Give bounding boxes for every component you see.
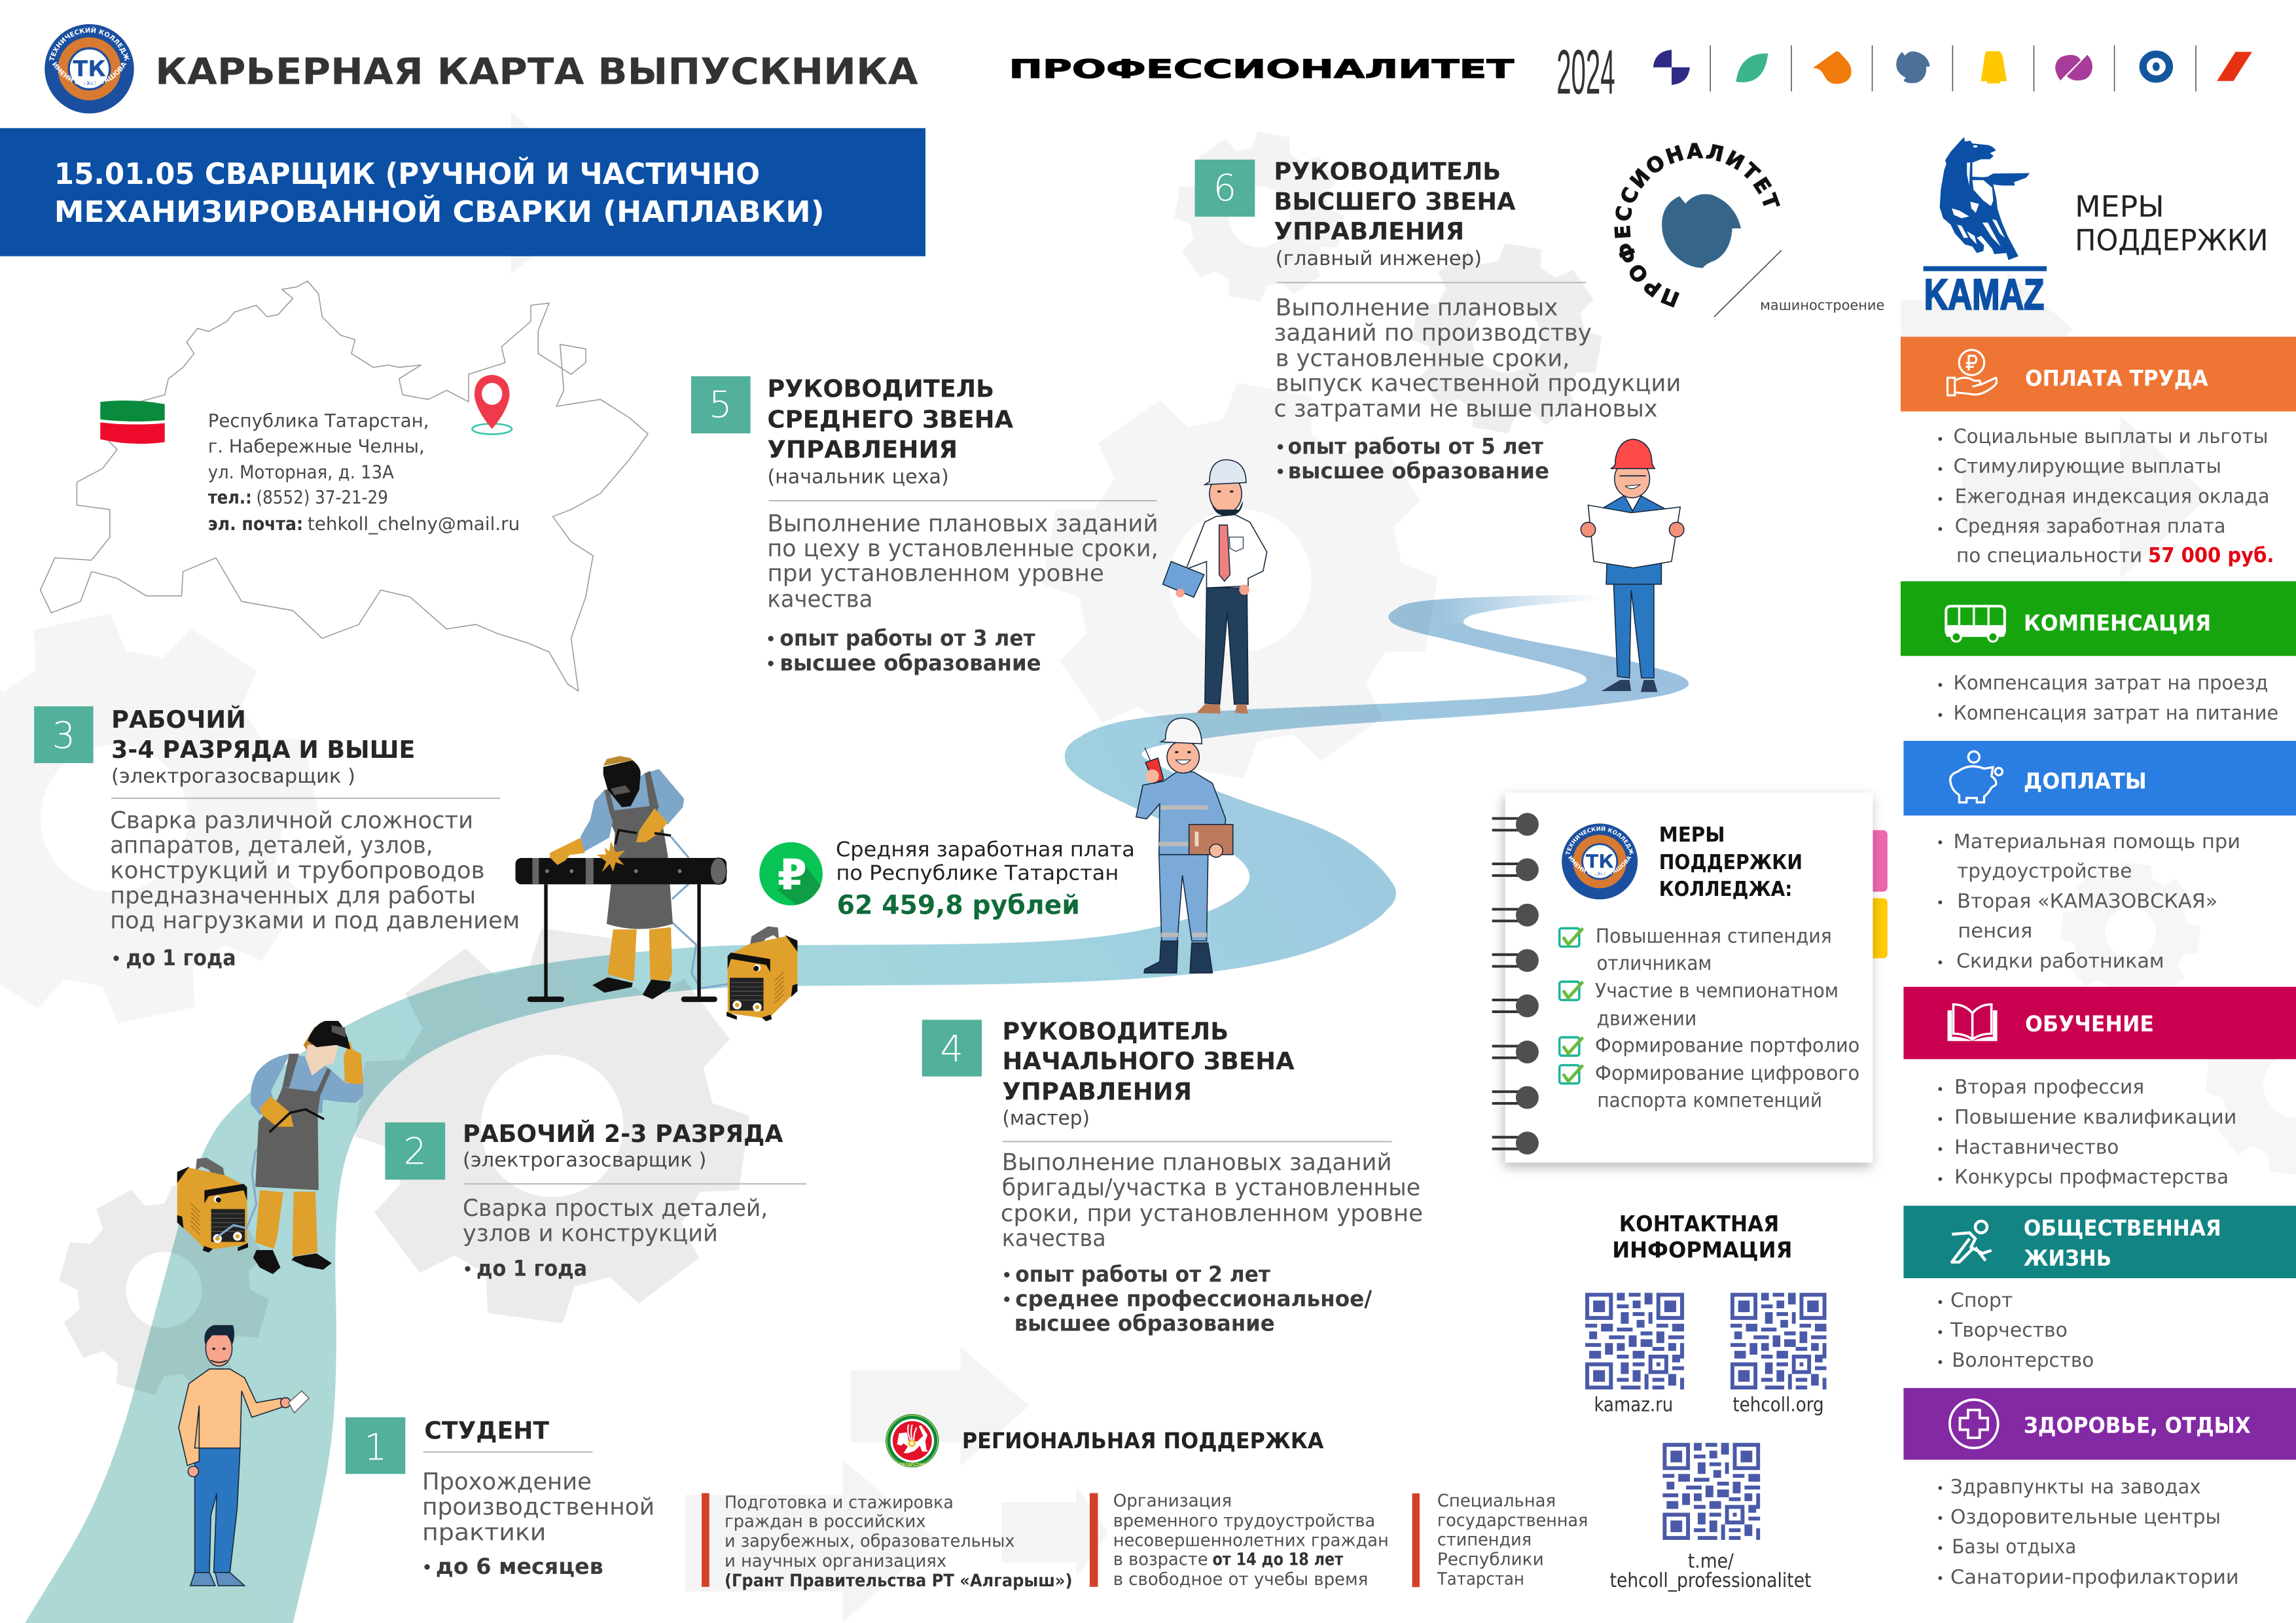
requirement: до 1 года bbox=[476, 1255, 587, 1281]
badge 3: 3 bbox=[52, 715, 75, 757]
employment block: в свободное от учебы время bbox=[1113, 1569, 1368, 1590]
compensation list bbox=[1938, 672, 2278, 726]
pay list: Средняя заработная плата bbox=[1955, 515, 2226, 539]
badge 6 bbox=[1195, 160, 1255, 217]
pay list bbox=[1938, 425, 2274, 568]
scholarship block bbox=[1412, 1491, 1588, 1589]
badge 3 bbox=[34, 706, 94, 763]
illustration: student bbox=[179, 1325, 309, 1586]
badge 6: 6 bbox=[1213, 167, 1236, 209]
scholarship block: Специальная bbox=[1437, 1491, 1556, 1511]
heading: СТУДЕНТ bbox=[424, 1417, 550, 1444]
address text: эл. почта: bbox=[208, 512, 303, 535]
heading bbox=[463, 1118, 783, 1173]
panel: public life bbox=[1903, 1205, 2296, 1373]
requirements bbox=[766, 625, 1041, 677]
college measures list: отличникам bbox=[1596, 952, 1712, 976]
education list bbox=[1938, 1076, 2236, 1190]
requirement: до 1 года bbox=[126, 945, 236, 971]
requirements: • bbox=[766, 656, 776, 673]
heading: (мастер) bbox=[1002, 1107, 1090, 1131]
heading: УПРАВЛЕНИЯ bbox=[767, 436, 958, 463]
public life list: Волонтерство bbox=[1952, 1349, 2094, 1373]
address text: г. Набережные Челны, bbox=[208, 435, 425, 457]
description: бригады/участка в установленные bbox=[1002, 1173, 1420, 1202]
college logo small: ИМЕНИ В.Д.ПОТАШОВА bbox=[1568, 855, 1631, 876]
description bbox=[1001, 1149, 1423, 1252]
panel: pay bbox=[1901, 337, 2296, 568]
Professionalitet engineering logo: машиностроение bbox=[1760, 298, 1885, 314]
Professionalitet engineering logo: ПРОФЕССИОНАЛИТЕТ bbox=[1614, 143, 1780, 308]
pay list: 57 000 руб. bbox=[2148, 544, 2274, 568]
Professionalitet engineering logo bbox=[1614, 143, 1885, 317]
address text: тел.: bbox=[208, 486, 252, 508]
compensation list: Компенсация затрат на питание bbox=[1953, 702, 2278, 726]
emblem of Tatarstan: ТАТАРСТАН bbox=[899, 1463, 925, 1467]
requirements: среднее профессиональное/ bbox=[1015, 1286, 1372, 1312]
health list: Базы отдыха bbox=[1952, 1536, 2076, 1560]
extra payments list: Скидки работникам bbox=[1956, 950, 2164, 973]
notebook heading: МЕРЫ bbox=[1659, 824, 1725, 847]
title: КАРЬЕРНАЯ КАРТА ВЫПУСКНИКА bbox=[155, 50, 919, 93]
regional support: РЕГИОНАЛЬНАЯ ПОДДЕРЖКА bbox=[962, 1428, 1324, 1454]
heading bbox=[767, 375, 1014, 489]
education list: Конкурсы профмастерства bbox=[1954, 1166, 2229, 1190]
requirements: опыт работы от 3 лет bbox=[780, 625, 1035, 652]
requirements: • bbox=[1276, 464, 1285, 482]
grant block: и научных организациях bbox=[725, 1550, 946, 1571]
step 1 bbox=[346, 1417, 655, 1580]
description: Сварка различной сложности bbox=[110, 806, 473, 834]
heading: ВЫСШЕГО ЗВЕНА bbox=[1274, 188, 1516, 215]
description: узлов и конструкций bbox=[463, 1219, 718, 1247]
description bbox=[110, 806, 520, 935]
description: качества bbox=[1002, 1224, 1106, 1252]
description: Выполнение плановых bbox=[1276, 293, 1558, 321]
description: Сварка простых деталей, bbox=[463, 1194, 768, 1222]
QR tehcoll.org: tehcoll.org bbox=[1732, 1394, 1824, 1418]
illustration: welder at the pipe, legs and apron bbox=[592, 808, 753, 1005]
heading: РУКОВОДИТЕЛЬ bbox=[1274, 158, 1501, 185]
requirements: • bbox=[1002, 1292, 1012, 1310]
requirements: • bbox=[766, 631, 776, 649]
extra payments list: трудоустройстве bbox=[1957, 860, 2132, 883]
QR kamaz.ru: kamaz.ru bbox=[1594, 1394, 1673, 1418]
panel: education bbox=[1903, 987, 2296, 1190]
icon: ruble bbox=[759, 842, 823, 906]
emblem of Tatarstan bbox=[886, 1414, 939, 1467]
heading: РАБОЧИЙ 2-3 РАЗРЯДА bbox=[463, 1118, 783, 1148]
header: college logo: ТЕХНИЧЕСКИЙ КОЛЛЕДЖ bbox=[48, 26, 130, 62]
icon: hand with ruble coin bbox=[1948, 350, 1997, 395]
grant block: (Грант Правительства РТ «Алгарыш») bbox=[725, 1570, 1073, 1591]
description bbox=[422, 1468, 655, 1546]
contact heading: ИНФОРМАЦИЯ bbox=[1612, 1237, 1792, 1263]
panel: public life: ЖИЗНЬ bbox=[2024, 1245, 2111, 1272]
requirements: опыт работы от 5 лет bbox=[1288, 433, 1544, 460]
requirement: • bbox=[422, 1560, 432, 1577]
heading: УПРАВЛЕНИЯ bbox=[1002, 1078, 1192, 1106]
description: по цеху в установленные сроки, bbox=[767, 535, 1158, 562]
illustration: welder at the pipe, torso bbox=[550, 756, 684, 872]
requirement: до 6 месяцев bbox=[436, 1554, 603, 1580]
public life list: Спорт bbox=[1950, 1289, 2013, 1313]
binder tabs bbox=[1859, 830, 1888, 958]
heading bbox=[1274, 158, 1516, 271]
panel: pay: ОПЛАТА ТРУДА bbox=[2025, 365, 2209, 391]
icon: piggy bank bbox=[1950, 751, 2002, 802]
requirement: • bbox=[111, 951, 121, 969]
contact heading: КОНТАКТНАЯ bbox=[1619, 1211, 1779, 1237]
heading bbox=[111, 704, 415, 789]
QR telegram: t.me/ bbox=[1688, 1550, 1734, 1574]
step 3 bbox=[34, 704, 520, 971]
description bbox=[767, 510, 1158, 613]
average salary callout: по Республике Татарстан bbox=[836, 863, 1119, 886]
pay list: Ежегодная индексация оклада bbox=[1955, 485, 2270, 508]
description bbox=[463, 1194, 768, 1247]
badge 1 bbox=[346, 1418, 405, 1474]
employment block bbox=[1090, 1491, 1389, 1590]
college logo small: 1982 bbox=[1594, 872, 1605, 876]
step 6 bbox=[1195, 158, 1681, 484]
specialty banner: 15.01.05 СВАРЩИК (РУЧНОЙ И ЧАСТИЧНО bbox=[54, 156, 760, 191]
health list: Здравпункты на заводах bbox=[1950, 1476, 2201, 1499]
heading: УПРАВЛЕНИЯ bbox=[1274, 217, 1464, 245]
specialty banner: МЕХАНИЗИРОВАННОЙ СВАРКИ (НАПЛАВКИ) bbox=[54, 194, 825, 229]
compensation list: Компенсация затрат на проезд bbox=[1953, 672, 2268, 696]
requirements: высшее образование bbox=[1288, 458, 1549, 484]
college measures list: Повышенная стипендия bbox=[1596, 925, 1832, 948]
badge 4: 4 bbox=[940, 1028, 963, 1070]
address text: tehkoll_chelny@mail.ru bbox=[308, 512, 520, 535]
description: Выполнение плановых заданий bbox=[767, 510, 1158, 537]
description: предназначенных для работы bbox=[110, 882, 476, 909]
heading: СРЕДНЕГО ЗВЕНА bbox=[767, 406, 1014, 433]
flag of Tatarstan bbox=[100, 401, 165, 444]
header: college logo bbox=[45, 24, 134, 114]
grant block: Подготовка и стажировка bbox=[725, 1492, 954, 1512]
step 5 bbox=[691, 375, 1158, 677]
panel: health and rest: ЗДОРОВЬЕ, ОТДЫХ bbox=[2024, 1412, 2251, 1438]
career road bbox=[24, 588, 1689, 1623]
education list: Наставничество bbox=[1954, 1136, 2119, 1160]
panel: public life: ОБЩЕСТВЕННАЯ bbox=[2024, 1215, 2221, 1241]
icon: ruble: ₽ bbox=[778, 850, 807, 900]
heading: РУКОВОДИТЕЛЬ bbox=[767, 375, 994, 402]
heading: (электрогазосварщик ) bbox=[463, 1149, 706, 1173]
description: в установленные сроки, bbox=[1276, 344, 1570, 372]
header: college logo: 1982 bbox=[82, 80, 96, 86]
scholarship block: государственная bbox=[1437, 1510, 1588, 1531]
notebook heading bbox=[1659, 824, 1803, 902]
illustration: shop manager bbox=[1163, 460, 1267, 713]
badge 4 bbox=[922, 1020, 982, 1077]
heading: 3-4 РАЗРЯДА И ВЫШЕ bbox=[111, 736, 415, 764]
description: производственной bbox=[422, 1493, 655, 1520]
header sector icons bbox=[1653, 45, 2252, 92]
QR tehcoll.org bbox=[1731, 1293, 1827, 1418]
address text bbox=[208, 410, 520, 535]
notebook heading: ПОДДЕРЖКИ bbox=[1659, 851, 1803, 875]
employment block: Организация bbox=[1113, 1491, 1232, 1511]
heading: РУКОВОДИТЕЛЬ bbox=[1002, 1018, 1229, 1045]
contact heading bbox=[1612, 1211, 1792, 1263]
step 2 bbox=[385, 1118, 806, 1281]
map of Tatarstan with address bbox=[41, 281, 648, 691]
panel: extra payments bbox=[1903, 741, 2296, 973]
description: под нагрузками и под давлением bbox=[110, 906, 520, 935]
description: выпуск качественной продукции bbox=[1276, 369, 1681, 397]
icon: medical cross bbox=[1950, 1400, 1998, 1448]
college measures list bbox=[1595, 925, 1859, 1113]
description: заданий по производству bbox=[1274, 319, 1592, 347]
college measures list: паспорта компетенций bbox=[1597, 1090, 1822, 1113]
heading: РАБОЧИЙ bbox=[111, 704, 246, 734]
illustration: welder standing bbox=[217, 1021, 363, 1274]
scholarship block: стипендия bbox=[1437, 1529, 1532, 1550]
notebook: college support bbox=[1492, 791, 1888, 1174]
header: college logo: ТК bbox=[73, 56, 107, 82]
contact information bbox=[1585, 1211, 1827, 1593]
profession brand wordmark: ПРОФЕССИОНАЛИТЕТ bbox=[1009, 56, 1514, 85]
support measures heading bbox=[2075, 189, 2268, 258]
support measures heading: МЕРЫ bbox=[2075, 189, 2164, 224]
header: college logo: ИМЕНИ В.Д.ПОТАШОВА bbox=[52, 62, 127, 85]
badge 2 bbox=[385, 1122, 445, 1180]
notebook heading: КОЛЛЕДЖА: bbox=[1659, 878, 1792, 902]
heading: НАЧАЛЬНОГО ЗВЕНА bbox=[1002, 1048, 1295, 1075]
extra payments list bbox=[1938, 830, 2240, 973]
location pin bbox=[473, 375, 512, 435]
requirements: • bbox=[1002, 1267, 1012, 1285]
scholarship block: Республики bbox=[1437, 1549, 1544, 1569]
college measures list: Участие в чемпионатном bbox=[1595, 980, 1839, 1003]
badge 5: 5 bbox=[709, 383, 732, 426]
employment block: несовершеннолетних граждан bbox=[1113, 1530, 1389, 1550]
step 4 bbox=[922, 1018, 1423, 1337]
health list: Оздоровительные центры bbox=[1950, 1506, 2221, 1529]
address text: ул. Моторная, д. 13А bbox=[208, 461, 395, 483]
grant block: граждан в российских bbox=[725, 1511, 926, 1531]
description: практики bbox=[422, 1518, 546, 1546]
requirements bbox=[1276, 433, 1549, 484]
college measures list: Формирование портфолио bbox=[1595, 1035, 1859, 1058]
public life list bbox=[1938, 1289, 2094, 1373]
description: качества bbox=[767, 585, 872, 613]
KAMAZ logo: KAMAZ bbox=[1924, 272, 2044, 319]
employment block: временного трудоустройства bbox=[1113, 1510, 1375, 1531]
text: 2024 bbox=[1556, 38, 1615, 109]
map outline bbox=[41, 281, 648, 691]
address text: Республика Татарстан, bbox=[208, 410, 429, 431]
illustration: welding machine right bbox=[726, 927, 797, 1021]
panel: compensation bbox=[1901, 581, 2296, 726]
requirements: опыт работы от 2 лет bbox=[1015, 1261, 1271, 1288]
employment block: от 14 до 18 лет bbox=[1212, 1549, 1344, 1569]
support measures heading: ПОДДЕРЖКИ bbox=[2075, 223, 2268, 258]
public life list: Творчество bbox=[1949, 1319, 2068, 1343]
grant block bbox=[702, 1492, 1073, 1591]
description: с затратами не выше плановых bbox=[1274, 395, 1658, 422]
background gears bbox=[0, 120, 2296, 1418]
pay list: Стимулирующие выплаты bbox=[1953, 455, 2221, 479]
QR telegram: tehcoll_professionalitet bbox=[1610, 1569, 1811, 1593]
description: конструкций и трубопроводов bbox=[110, 857, 485, 884]
grant block: и зарубежных, образовательных bbox=[725, 1531, 1014, 1551]
icon: open book bbox=[1948, 1005, 1998, 1041]
college measures list: Формирование цифрового bbox=[1595, 1062, 1859, 1086]
average salary callout bbox=[759, 839, 1135, 921]
extra payments list: Вторая «КАМАЗОВСКАЯ» bbox=[1957, 890, 2217, 914]
background arrows bbox=[511, 113, 2210, 1622]
badge 1: 1 bbox=[364, 1426, 387, 1469]
QR kamaz.ru bbox=[1585, 1293, 1684, 1418]
requirements bbox=[1002, 1261, 1372, 1337]
college logo small bbox=[1562, 823, 1638, 899]
QR telegram bbox=[1610, 1443, 1811, 1593]
badge 2: 2 bbox=[403, 1130, 427, 1173]
address text: (8552) 37-21-29 bbox=[257, 486, 388, 508]
description bbox=[1274, 293, 1681, 422]
description: при установленном уровне bbox=[767, 560, 1104, 587]
illustration: chief engineer bbox=[1581, 439, 1684, 692]
description: Выполнение плановых заданий bbox=[1002, 1149, 1392, 1176]
panel: compensation: КОМПЕНСАЦИЯ bbox=[2024, 610, 2211, 636]
description: аппаратов, деталей, узлов, bbox=[110, 831, 433, 859]
description: сроки, при установленном уровне bbox=[1001, 1199, 1423, 1227]
panel: health and rest bbox=[1903, 1388, 2296, 1590]
pay list: Социальные выплаты и льготы bbox=[1953, 425, 2268, 449]
panel: education: ОБУЧЕНИЕ bbox=[2025, 1011, 2154, 1037]
heading bbox=[1002, 1018, 1295, 1131]
illustration: welding machine left bbox=[177, 1158, 248, 1253]
college logo small: ТЕХНИЧЕСКИЙ КОЛЛЕДЖ bbox=[1566, 826, 1634, 855]
education list: Повышение квалификации bbox=[1954, 1106, 2236, 1130]
icon: bus bbox=[1946, 606, 2005, 641]
heading: (начальник цеха) bbox=[767, 465, 949, 489]
college measures list: движении bbox=[1596, 1008, 1696, 1031]
binder rings bbox=[1492, 813, 1539, 1154]
extra payments list: Материальная помощь при bbox=[1953, 830, 2240, 854]
KAMAZ logo bbox=[1924, 137, 2047, 319]
heading: (электрогазосварщик ) bbox=[111, 765, 355, 789]
pay list: по специальности bbox=[1956, 544, 2142, 568]
regional support bbox=[702, 1414, 1588, 1591]
employment block: в возрасте bbox=[1113, 1549, 1208, 1569]
college logo small: ТК bbox=[1586, 850, 1615, 873]
health list: Санатории-профилактории bbox=[1950, 1566, 2239, 1590]
panel: extra payments: ДОПЛАТЫ bbox=[2024, 768, 2147, 794]
requirements: высшее образование bbox=[1014, 1310, 1275, 1337]
average salary callout: 62 459,8 рублей bbox=[837, 891, 1080, 921]
requirements: высшее образование bbox=[780, 650, 1041, 677]
scholarship block: Татарстан bbox=[1436, 1569, 1524, 1589]
description: Прохождение bbox=[422, 1468, 592, 1495]
extra payments list: пенсия bbox=[1958, 920, 2032, 944]
heading: (главный инженер) bbox=[1276, 247, 1482, 271]
average salary callout: Средняя заработная плата bbox=[836, 839, 1135, 862]
illustration: foreman bbox=[1136, 718, 1233, 973]
requirements: • bbox=[1276, 439, 1285, 457]
requirement: • bbox=[463, 1261, 473, 1279]
checkboxes bbox=[1560, 928, 1583, 1084]
badge 5 bbox=[691, 376, 751, 433]
education list: Вторая профессия bbox=[1954, 1076, 2144, 1099]
specialty banner bbox=[0, 128, 925, 257]
health list bbox=[1938, 1476, 2239, 1590]
illustration: welding table and pipe bbox=[516, 858, 726, 999]
icon: runner bbox=[1952, 1221, 1992, 1262]
